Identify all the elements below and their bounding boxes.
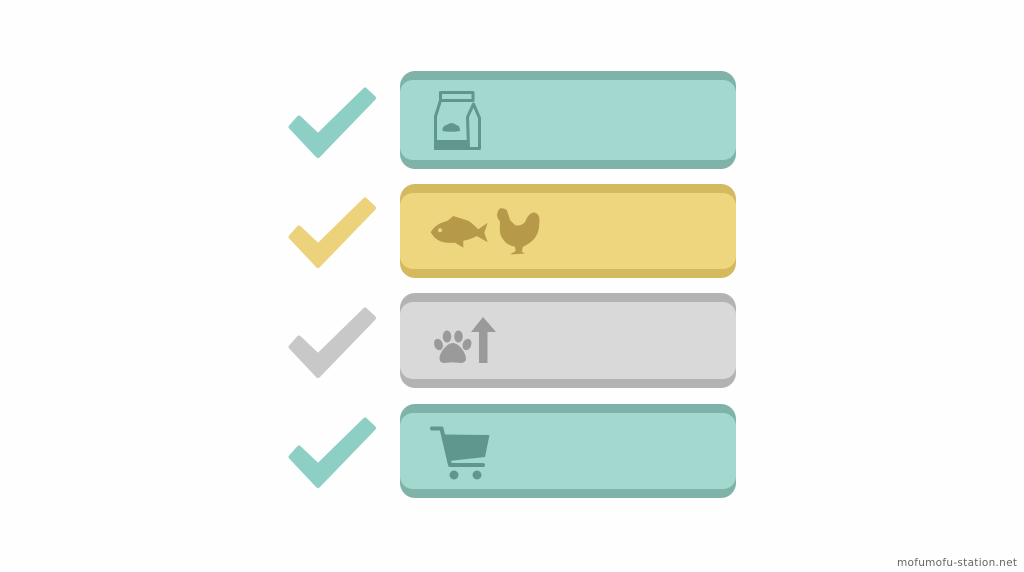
panel: yellow bar (400, 184, 736, 278)
watermark: mofumofu-station.net (897, 557, 1017, 569)
icon: fish (431, 216, 488, 248)
check mark: teal (291, 90, 374, 156)
icon: chicken (497, 208, 540, 254)
panel: teal bar 1 (400, 71, 736, 169)
icon: paw (432, 330, 473, 363)
panel: teal bar 2 (400, 404, 736, 498)
check mark: grey (291, 310, 374, 376)
icon: shopping cart (432, 428, 490, 480)
panel: grey bar (400, 293, 736, 388)
row 3: paw and arrow (291, 293, 736, 388)
check mark: teal (291, 420, 374, 486)
check mark: yellow (291, 200, 374, 266)
icon: food bag (434, 92, 480, 150)
icon: up arrow (471, 317, 496, 363)
row 1: food bag (291, 71, 736, 169)
row 4: shopping cart (291, 404, 736, 498)
row 2: fish and chicken (291, 184, 736, 278)
